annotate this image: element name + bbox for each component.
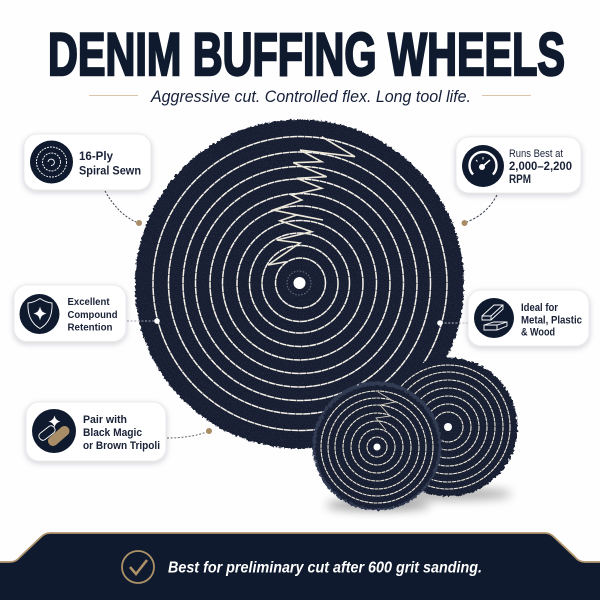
text: Retention (68, 322, 112, 334)
text: Metal, Plastic (521, 314, 582, 326)
callout: excellent compound retention (14, 285, 126, 342)
text: 2,000–2,200 (509, 161, 572, 173)
icon: check badge (122, 551, 154, 583)
connector: pair with to wheel (167, 428, 212, 438)
text: Runs Best at (509, 148, 563, 160)
text: Excellent (68, 296, 110, 308)
icon: material bars (474, 298, 514, 338)
icon: shield (20, 294, 60, 334)
small wheels (312, 358, 518, 510)
text (521, 302, 582, 338)
text: Ideal for (521, 302, 559, 314)
text (79, 151, 141, 178)
connector: 16-ply to wheel (105, 191, 142, 226)
callout: ideal for materials (468, 290, 589, 346)
text: Compound (68, 309, 118, 321)
subtitle: Aggressive cut. Controlled flex. Long tool life. (150, 87, 471, 106)
text: Spiral Sewn (79, 166, 141, 178)
text: Black Magic (83, 427, 142, 439)
icon: spiral stitching (30, 140, 73, 184)
text: or Brown Tripoli (83, 440, 160, 452)
text: RPM (509, 174, 531, 186)
banner text: Best for preliminary cut after 600 grit sanding. (168, 560, 482, 576)
text (68, 296, 118, 334)
connector: compound retention to wheel (127, 318, 160, 324)
large denim wheel (135, 120, 464, 448)
text: 16-Ply (79, 151, 114, 163)
connector: rpm to wheel (462, 195, 497, 226)
front small wheel (312, 382, 442, 510)
text (509, 148, 572, 186)
bottom banner (0, 533, 600, 600)
callout: runs best rpm (456, 137, 581, 193)
callout: pair with compounds (26, 402, 166, 461)
text: Pair with (83, 414, 127, 426)
text (83, 414, 160, 452)
back small wheel (378, 358, 518, 496)
icon: gauge (462, 145, 504, 187)
icon: compound bars (32, 409, 76, 453)
text: & Wood (521, 326, 555, 338)
connector: materials to wheel (437, 320, 468, 326)
callout: 16-ply spiral sewn (24, 134, 151, 190)
